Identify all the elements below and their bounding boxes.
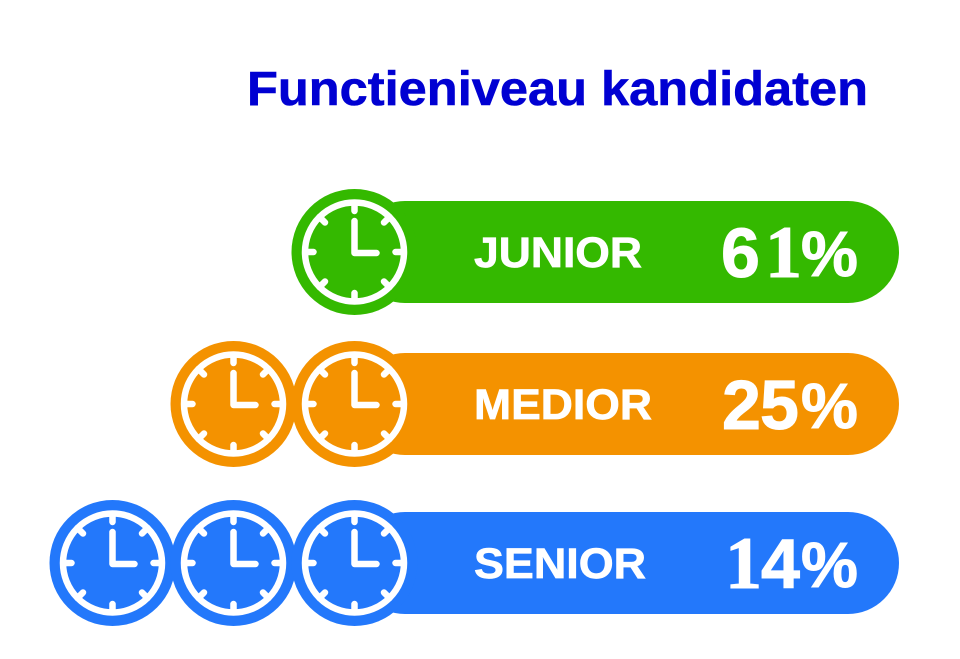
icon: senior clock 3 bbox=[50, 500, 176, 626]
label: medior: MEDIOR bbox=[474, 381, 652, 429]
value: junior percentage: % bbox=[801, 218, 858, 290]
panel: junior row bbox=[292, 189, 899, 315]
value: junior percentage: 6 bbox=[721, 214, 760, 292]
icon: medior clock 2 bbox=[170, 341, 296, 467]
panel: senior row bbox=[50, 500, 899, 626]
value: senior percentage: 4 bbox=[761, 525, 800, 603]
bar: senior bbox=[354, 512, 899, 614]
panel: medior row bbox=[170, 341, 899, 467]
icon: junior clock bbox=[292, 189, 418, 315]
bar: junior bbox=[354, 201, 899, 303]
value: medior percentage: 25 bbox=[722, 366, 799, 444]
label: junior: JUNIOR bbox=[474, 229, 642, 277]
label: senior: SENIOR bbox=[474, 540, 646, 588]
value: senior percentage: % bbox=[801, 529, 858, 601]
bar: medior bbox=[354, 353, 899, 455]
value: medior percentage: % bbox=[801, 370, 858, 442]
value: junior percentage: 1 bbox=[765, 212, 802, 294]
icon: senior clock 2 bbox=[170, 500, 296, 626]
icon: senior clock 1 bbox=[292, 500, 418, 626]
title: Functieniveau kandidaten bbox=[247, 62, 868, 116]
value: senior percentage: 1 bbox=[725, 523, 762, 605]
icon: medior clock 1 bbox=[292, 341, 418, 467]
